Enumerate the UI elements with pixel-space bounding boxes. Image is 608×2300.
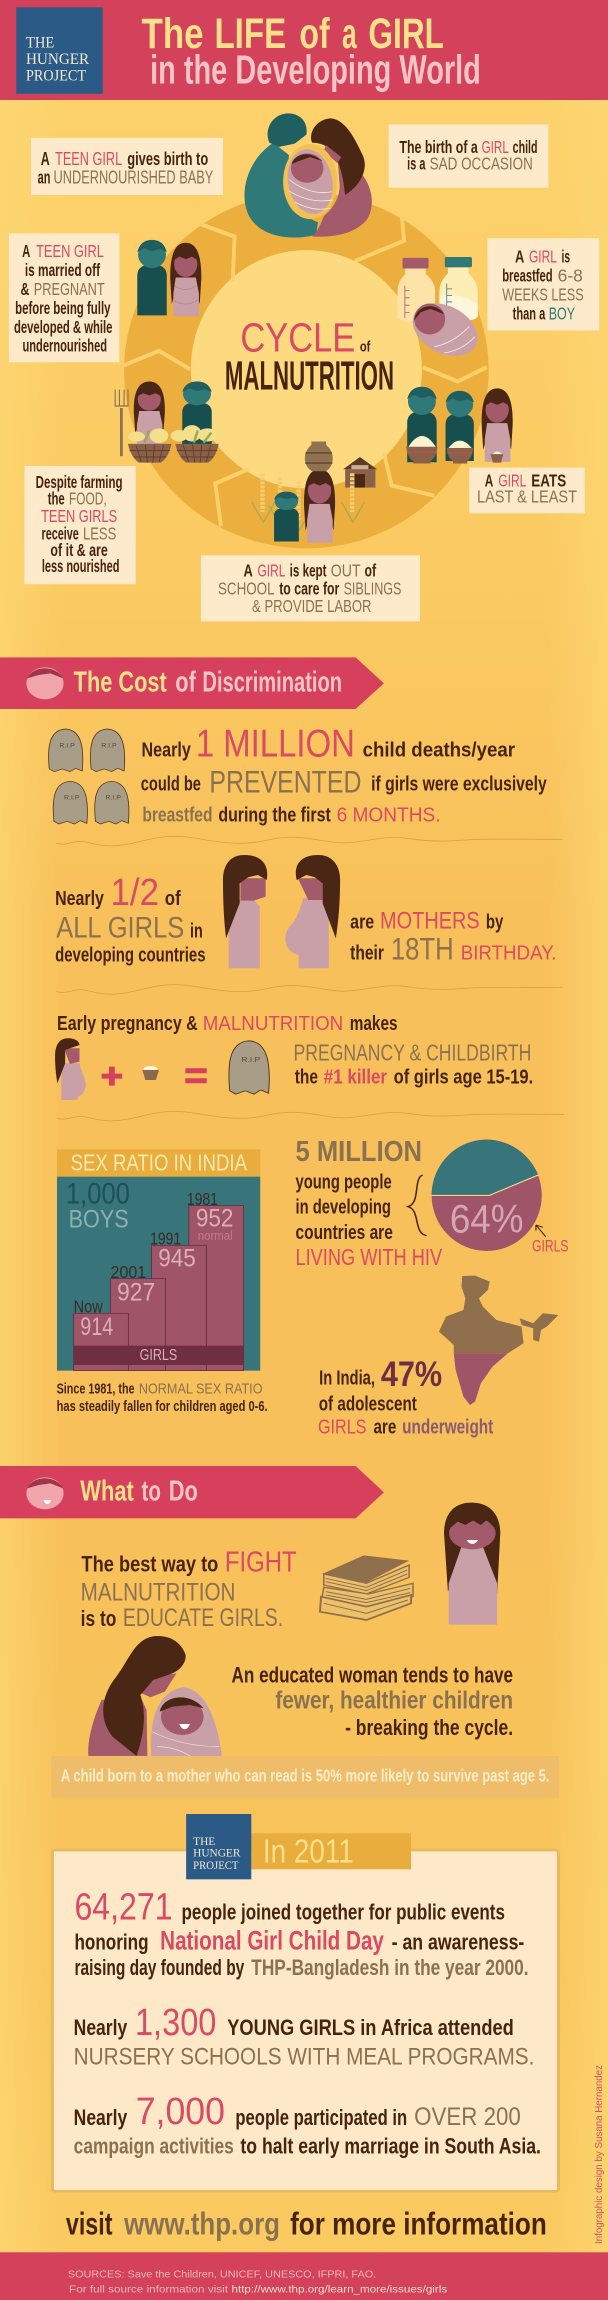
stat: 7,000 people: people participated in [235,2106,407,2131]
center title: of [360,339,371,356]
stat: early pregnancy equation: makes [350,1012,397,1035]
chart caption: NORMAL SEX RATIO [139,1381,263,1397]
stat: mothers by 18: MOTHERS [380,906,480,934]
callout: birth of a girl: The birth of a [399,137,478,157]
stat: 47 percent underweight: of adolescent [319,1392,417,1415]
stat: 47 percent underweight: are [373,1415,396,1438]
logo: The Hunger Project [16,7,103,94]
stat: 7,000 people: OVER 200 [414,2102,521,2131]
icon: mother and smiling baby [88,1636,222,1756]
stat: half of all girls: developing countries [55,943,206,966]
callout: teen girl gives birth: gives birth to [127,148,208,169]
callout: out of school: SCHOOL [218,578,275,599]
pie label: girls [532,1225,569,1255]
call to action: visit website: visit [66,2207,113,2242]
callout: birth of a girl: SAD OCCASION [430,153,533,173]
callout: married and pregnant: TEEN GIRL [36,241,104,261]
callout: teen girl gives birth: TEEN GIRL [55,148,122,169]
callout: farming: less nourished [42,556,119,576]
callout: married and pregnant: & [21,279,30,299]
icon: bottles and crying baby [397,257,486,366]
stat: 64,271 people: honoring [74,1930,149,1955]
chart: sex ratio in India: SEX RATIO IN INDIA [71,1151,247,1176]
callout: teen girl gives birth: an [38,166,50,188]
stat: 5 million living with HIV: 5 MILLION [296,1135,422,1167]
chart caption: Since 1981, the [57,1381,135,1397]
section: In 2011 panel [0,1814,608,2300]
callout: farming: Despite farming [36,472,123,492]
stat: 47 percent underweight: In India, [319,1366,375,1389]
stat: 47 percent underweight [318,1356,494,1438]
pie label: girls: GIRLS [532,1237,569,1255]
callout: teen girl gives birth: UNDERNOURISHED BABY [54,166,213,188]
callout: married and pregnant: developed & while [14,317,113,337]
stat: 7,000 people [74,2089,541,2159]
stat: half of all girls: in [190,919,203,942]
callout: farming: the [48,488,65,509]
callout: eats last: A [485,470,494,491]
banner: to [142,1475,161,1507]
text: fight malnutrition: EDUCATE GIRLS. [123,1604,283,1632]
text: educated woman [232,1663,513,1741]
logo: The Hunger Project: THE [26,35,54,52]
stat: 1,300 young girls: 1,300 [135,2000,216,2043]
center title: MALNUTRITION [225,354,394,399]
stat: 1 million deaths: breastfed [142,803,213,826]
stat: 7,000 people: Nearly [74,2106,128,2131]
stat: 5 million living with HIV [296,1135,443,1271]
chart: sex ratio in India: 945 [158,1245,196,1272]
callout: farming: of it & are [50,540,108,560]
callout: out of school: SIBLINGS [344,578,401,599]
logo: The Hunger Project: PROJECT [26,68,86,84]
callout: birth of a girl: GIRL [482,137,509,157]
stat: mothers by 18: BIRTHDAY. [461,941,556,964]
stat: 5 million living with HIV: in developing [296,1195,391,1218]
chart: sex ratio in India: 1991 [150,1229,181,1249]
callout: teen girl gives birth: A [41,148,50,169]
stat: early pregnancy equation [55,1012,533,1100]
icon: girl carrying water, sibling and house [252,441,377,543]
chart: sex ratio in India: Now [74,1297,103,1317]
banner [0,1466,384,1518]
callout: married and pregnant: A [22,241,30,261]
logo: The Hunger Project: THE [193,1834,215,1848]
stat: 47 percent underweight: 47% [381,1356,442,1394]
heading: In 2011: In 2011 [263,1832,354,1870]
text: educated woman: - breaking the cycle. [345,1716,513,1741]
callout: farming: receive [41,523,79,543]
callout: farming: TEEN GIRLS [41,505,117,526]
title: a [342,9,357,57]
stat: 64,271 people: 64,271 [74,1884,173,1928]
footer band: SOURCES: Save the Children, UNICEF, UNESCO, IFPRI, FAO. [68,2269,376,2280]
stat: 64,271 people: - an awareness- [392,1930,524,1955]
chart: sex ratio in India: 927 [117,1279,155,1306]
icon: four tombstones: R.I.P [101,743,117,749]
stat: 1,300 young girls: Nearly [74,2016,128,2041]
stat: 7,000 people: campaign activities [74,2134,234,2159]
map: India [439,1276,558,1405]
callout: birth of a girl: child [513,137,537,157]
banner: The Cost [74,666,167,698]
callout: married and pregnant: PREGNANT [34,279,105,299]
stat: 5 million living with HIV: LIVING WITH HIV [296,1246,443,1271]
stat: 7,000 people: 7,000 [136,2089,225,2132]
icon: farming girl and boy with baskets [115,381,219,463]
stat: 47 percent underweight: GIRLS [318,1415,366,1438]
stat: 1 million deaths: PREVENTED [209,765,361,800]
banner: What [80,1475,134,1507]
logo: The Hunger Project: PROJECT [193,1858,239,1872]
stat: half of all girls: of [165,887,181,910]
text: fight malnutrition: is to [81,1607,116,1632]
icon: equals [185,1068,207,1083]
chart: HIV pie [432,1140,542,1251]
icon: four tombstones [49,729,129,824]
icon: plus [102,1067,122,1086]
icon: girl and pregnant girl [223,855,340,968]
stat: 64,271 people: National Girl Child Day [160,1926,384,1956]
chart: sex ratio in India: GIRLS [140,1345,177,1364]
stat: 47 percent underweight: underweight [402,1415,494,1438]
callout: married and pregnant [9,233,119,362]
brace [408,1175,427,1236]
callout: farming: LESS [83,523,116,543]
section: What to Do [0,1466,559,1798]
icon: smiling girl [444,1503,500,1625]
stat: half of all girls [55,870,206,966]
stat: 1,300 young girls [74,2000,534,2070]
callout: married and pregnant: before being fully [15,298,111,318]
icon: tombstone: R.I.P [241,1056,260,1064]
callout: breastfed less: 6-8 [558,265,583,286]
icon: four tombstones: R.I.P [64,795,79,801]
stat: mothers by 18: by [486,910,503,933]
stat: mothers by 18: 18TH [391,932,454,967]
callout band: child born to a mother [51,1756,559,1798]
chart caption [57,1381,268,1415]
text: fight malnutrition: MALNUTRITION [81,1579,235,1606]
title [142,9,481,93]
callout: eats last: LAST & LEAST [477,486,577,507]
banner: Do [169,1475,198,1507]
stat: early pregnancy equation: of girls age 15-19. [394,1065,533,1088]
chart: sex ratio in India: BOYS [69,1206,129,1233]
footer band: For full source information visit [69,2284,228,2295]
stat: 1 million deaths: 1 MILLION [196,722,355,766]
chart: sex ratio in India: 1981 [187,1189,218,1210]
text: fight malnutrition [81,1546,297,1632]
stat: mothers by 18 [350,906,556,967]
title: GIRL [368,9,444,57]
cycle of malnutrition diagram [9,113,599,621]
call to action: visit website: www.thp.org [123,2207,280,2242]
callout: breastfed less: than a [513,303,545,324]
callout: eats last [469,468,585,513]
banner [0,657,384,709]
icon: small pregnant girl [55,1038,86,1100]
stat: 64,271 people: raising day founded by [74,1956,245,1981]
icon: rice bowl [142,1066,159,1080]
title: in the Developing World [150,48,481,93]
chart: sex ratio in India: 914 [80,1313,113,1341]
callout: breastfed less: is [562,246,570,266]
title: of [299,9,330,57]
header band [0,0,608,100]
footer band [0,2252,608,2300]
callout: breastfed less: breastfed [502,265,553,286]
callout: married and pregnant: undernourished [22,335,107,356]
stat: mothers by 18: their [350,941,384,964]
title: The [142,9,204,57]
callout: eats last: GIRL [498,470,526,491]
callout: birth of a girl: is a [407,153,426,173]
callout: out of school [201,555,420,621]
callout: breastfed less [487,238,599,330]
center title [225,316,394,399]
chart: sex ratio in India: 952 [196,1205,233,1232]
chart: sex ratio in India: 1,000 [66,1177,130,1210]
logo: The Hunger Project: HUNGER [193,1846,241,1859]
stat: 1 million deaths [141,722,547,826]
chart: HIV pie: 64% [450,1198,524,1242]
stat: 1 million deaths: child deaths/year [363,738,515,761]
stat: 64,271 people [74,1884,529,1981]
callout: out of school: OUT [331,560,361,581]
callout: breastfed less: GIRL [529,246,557,266]
chart: sex ratio in India [57,1149,260,1371]
footer band: http://www.thp.org/learn_more/issues/girls [232,2284,448,2295]
stat: 5 million living with HIV: young people [296,1170,392,1193]
stat: 1 million deaths: during the first [218,803,331,826]
chart: sex ratio in India: 2001 [111,1262,146,1283]
callout: farming: FOOD, [69,488,107,509]
stat: 5 million living with HIV: countries are [296,1221,393,1244]
stat: early pregnancy equation: the [295,1065,318,1088]
stat: 1 million deaths: could be [141,772,201,795]
stat: 1 million deaths: Nearly [142,738,191,761]
banner: of [175,666,196,698]
panel background [52,1850,558,2191]
icon: four tombstones: R.I.P [105,795,121,801]
text: fight malnutrition: FIGHT [225,1546,297,1578]
icon: four tombstones: R.I.P [59,743,75,749]
credit: infographic design: Infographic design by Susana Hernandez [594,2065,605,2244]
logo: The Hunger Project [186,1814,251,1879]
callout: breastfed less: A [515,246,525,266]
callout: out of school: is kept [290,560,327,581]
icon: married couple [137,240,201,316]
icon: parents with baby [244,113,372,238]
chart caption: has steadily fallen for children aged 0-6. [57,1399,268,1415]
callout: out of school: of [365,560,376,581]
icon: tombstone [229,1041,269,1094]
logo: The Hunger Project: HUNGER [26,52,90,68]
callout: teen girl gives birth [31,138,223,195]
call to action: visit website [66,2207,547,2242]
banner: Discrimination [202,666,342,698]
stat: early pregnancy equation: MALNUTRITION [203,1012,343,1035]
callout: birth of a girl [389,124,548,188]
callout: eats last: EATS [531,470,566,491]
callout: breastfed less: BOY [549,303,575,324]
chart: sex ratio in India: normal [198,1229,233,1243]
section: sex ratio, HIV and India stats [57,1111,569,1438]
section: The Cost of Discrimination [0,657,562,1100]
callout: out of school: A [244,560,253,581]
center title: CYCLE [240,316,355,361]
text: educated woman: fewer, healthier children [275,1686,513,1714]
icon: family eating [406,387,513,463]
stat: half of all girls: Nearly [55,887,104,910]
callout: out of school: & PROVIDE LABOR [252,596,372,616]
callout: married and pregnant: is married off [25,260,100,280]
stat: half of all girls: ALL GIRLS [56,911,184,944]
stat: mothers by 18: are [350,910,374,933]
stat: early pregnancy equation: Early pregnancy & [57,1012,198,1035]
stat: 1 million deaths: 6 MONTHS. [337,803,441,826]
stat: early pregnancy equation: #1 killer [324,1065,387,1088]
callout: out of school: GIRL [257,560,286,581]
callout: farming [24,466,136,584]
text: fight malnutrition: The best way to [81,1552,218,1577]
callout: out of school: to care for [279,578,339,599]
title: LIFE [214,9,286,57]
stat: half of all girls: 1/2 [111,870,159,913]
ring [124,193,489,548]
icon: books [320,1555,413,1620]
